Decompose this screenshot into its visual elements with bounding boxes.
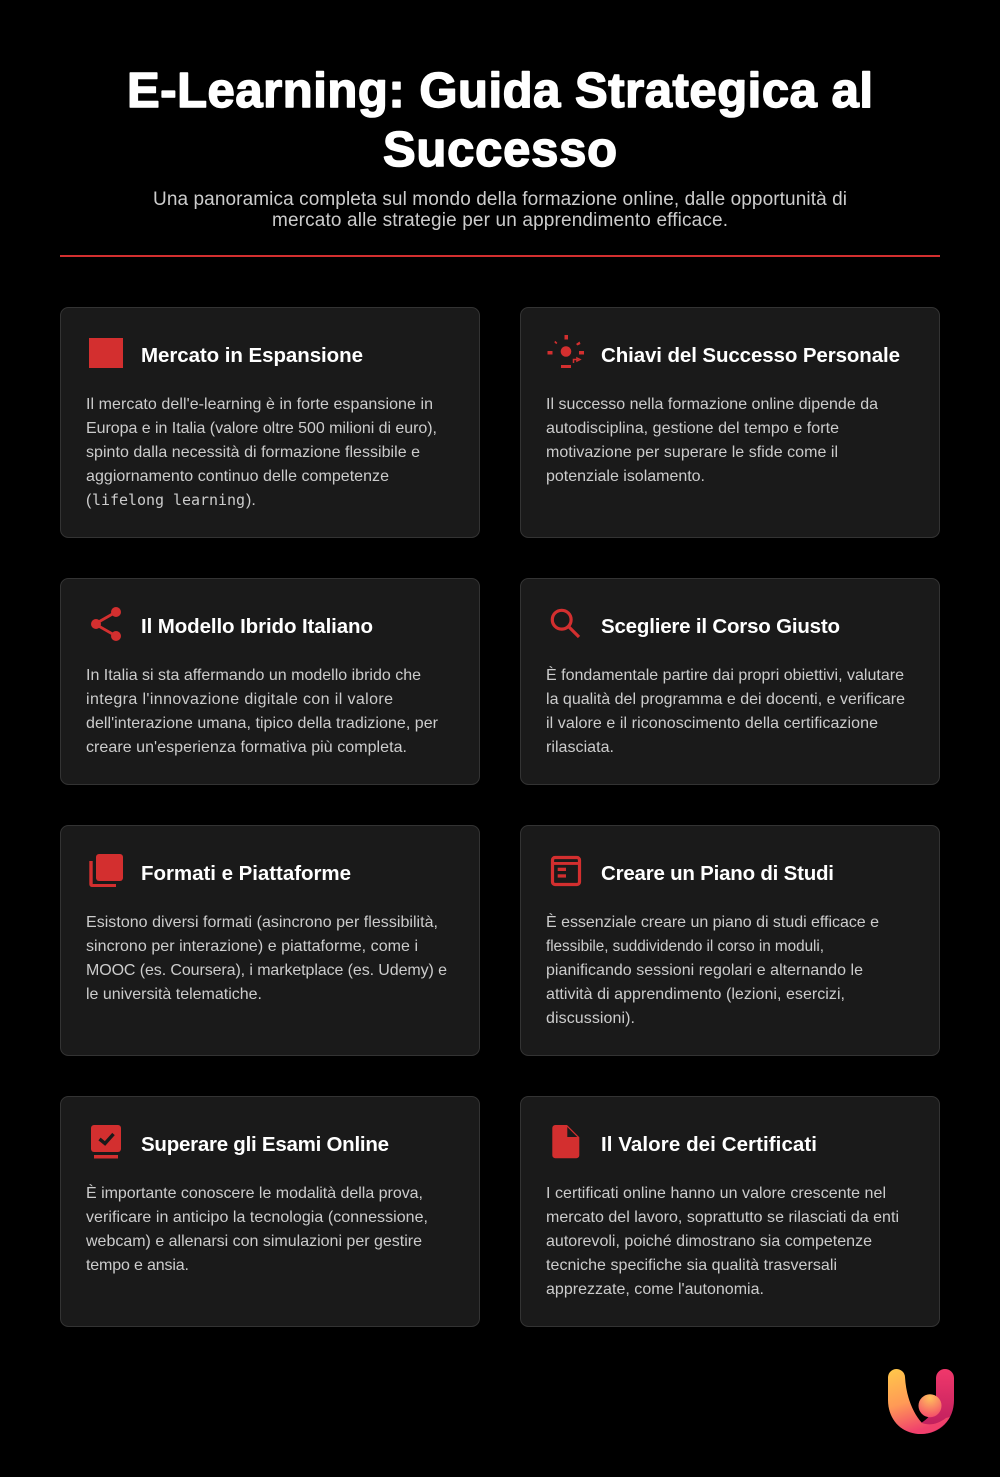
text block: chiavi: autodisciplina, gestione del tempo e forte [546, 420, 839, 437]
panel: Formati e Piattaforme [60, 826, 480, 1056]
text block: piano: È essenziale creare un piano di studi efficace e [546, 912, 879, 931]
panel: Creare un Piano di Studi [520, 826, 940, 1056]
text block: esami: webcam) e allenarsi con simulazioni per gestire [85, 1233, 422, 1250]
text block: mercato: aggiornamento continuo delle competenze [86, 468, 389, 485]
title: E-Learning: Guida Strategica al [127, 64, 873, 118]
icon: exam checkmark [91, 1125, 121, 1158]
text block: esami [85, 1183, 428, 1274]
text block: corso [546, 665, 905, 756]
text block: piano: flessibile, suddividendo il corso in moduli, [546, 938, 824, 955]
heading: Mercato in Espansione: Mercato in Espansione [141, 344, 363, 367]
text block: mercato: Il mercato dell'e-learning è in forte espansione in [86, 396, 433, 413]
text block: certificati: apprezzate, come l'autonomia. [546, 1281, 764, 1298]
subtitle: mercato alle strategie per un apprendimento efficace. [272, 210, 728, 231]
text block: chiavi [546, 396, 878, 485]
text block: piano: attività di apprendimento (lezioni, esercizi, [546, 986, 845, 1003]
text block: esami: È importante conoscere le modalità della prova, [86, 1183, 423, 1202]
text block: mercato [86, 396, 437, 509]
icon: sun rays [548, 335, 584, 368]
icon: square [89, 338, 123, 368]
text block: corso: È fondamentale partire dai propri obiettivi, valutare [546, 665, 904, 684]
title: Successo [383, 123, 617, 177]
text block: piano [546, 912, 879, 1027]
text block: formati: Esistono diversi formati (asincrono per flessibilità, [86, 914, 438, 931]
heading: Chiavi del Successo Personale: Chiavi del Successo Personale [601, 344, 900, 367]
text block: chiavi: Il successo nella formazione online dipende da [546, 396, 878, 413]
text block: formati: le università telematiche. [86, 986, 262, 1003]
text block: corso: il valore e il riconoscimento della certificazione [546, 715, 878, 732]
text block: corso: rilasciata. [546, 739, 614, 756]
text block: esami: tempo e ansia. [86, 1257, 189, 1274]
panel: Il Modello Ibrido Italiano [60, 578, 480, 784]
text block: certificati: I certificati online hanno un valore crescente nel [546, 1185, 886, 1202]
heading: Il Modello Ibrido Italiano: Il Modello Ibrido Italiano [141, 615, 373, 638]
heading: Scegliere il Corso Giusto: Scegliere il Corso Giusto [601, 615, 840, 638]
text block: mercato: Europa e in Italia (valore oltre 500 milioni di euro), [86, 420, 437, 437]
text block: mercato: ( [86, 492, 92, 509]
text block: corso: la qualità del programma e dei docenti, e verificare [546, 691, 905, 708]
text block: certificati: tecniche specifiche sia qualità trasversali [546, 1257, 837, 1274]
icon: stacked layers [89, 854, 123, 887]
heading: Superare gli Esami Online: Superare gli Esami Online [141, 1133, 389, 1156]
subtitle: Una panoramica completa sul mondo della formazione online, dalle opportunità di [153, 189, 847, 210]
text block: formati: sincrono per interazione) e piattaforme, come i [86, 938, 418, 955]
text block: modello: dell'interazione umana, tipico della tradizione, per [86, 715, 439, 732]
panel: Scegliere il Corso Giusto [520, 578, 940, 784]
panel: Il Valore dei Certificati [520, 1096, 940, 1326]
text block: mercato: lifelong learning [92, 491, 245, 509]
icon: magnifier [552, 610, 579, 637]
text block: modello: integra l'innovazione digitale con il valore [86, 691, 393, 708]
text block: chiavi: potenziale isolamento. [546, 468, 705, 485]
subtitle [153, 189, 847, 231]
text block: formati: MOOC (es. Coursera), i marketplace (es. Udemy) e [86, 962, 447, 979]
text block: piano: discussioni). [546, 1010, 635, 1027]
text block: certificati [546, 1185, 899, 1298]
text block: mercato: ). [246, 492, 256, 509]
text block: chiavi: motivazione per superare le sfide come il [546, 444, 838, 461]
text block: mercato: spinto dalla necessità di formazione flessibile e [86, 444, 420, 461]
panel: Chiavi del Successo Personale [520, 308, 940, 538]
logo [888, 1369, 954, 1434]
text block: modello: In Italia si sta affermando un modello ibrido che [86, 667, 421, 684]
text block: modello: creare un'esperienza formativa più completa. [86, 739, 407, 756]
icon: calendar planner [552, 858, 580, 884]
text block: certificati: autorevoli, poiché dimostrano sia competenze [546, 1233, 872, 1250]
text block: formati [86, 914, 447, 1003]
panel: Superare gli Esami Online [60, 1096, 480, 1326]
panel: Mercato in Espansione [60, 308, 480, 538]
icon: share [91, 607, 121, 641]
text block: certificati: mercato del lavoro, soprattutto se rilasciati da enti [546, 1209, 899, 1226]
logo ball [918, 1394, 942, 1417]
heading: Creare un Piano di Studi: Creare un Piano di Studi [601, 862, 834, 885]
text block: piano: pianificando sessioni regolari e alternando le [546, 962, 863, 979]
text block: modello [86, 667, 439, 756]
text block: esami: verificare in anticipo la tecnologia (connessione, [86, 1209, 428, 1226]
title [127, 64, 873, 177]
heading: Il Valore dei Certificati: Il Valore dei Certificati [601, 1133, 817, 1156]
heading: Formati e Piattaforme: Formati e Piattaforme [141, 862, 351, 885]
icon: document [552, 1125, 579, 1158]
